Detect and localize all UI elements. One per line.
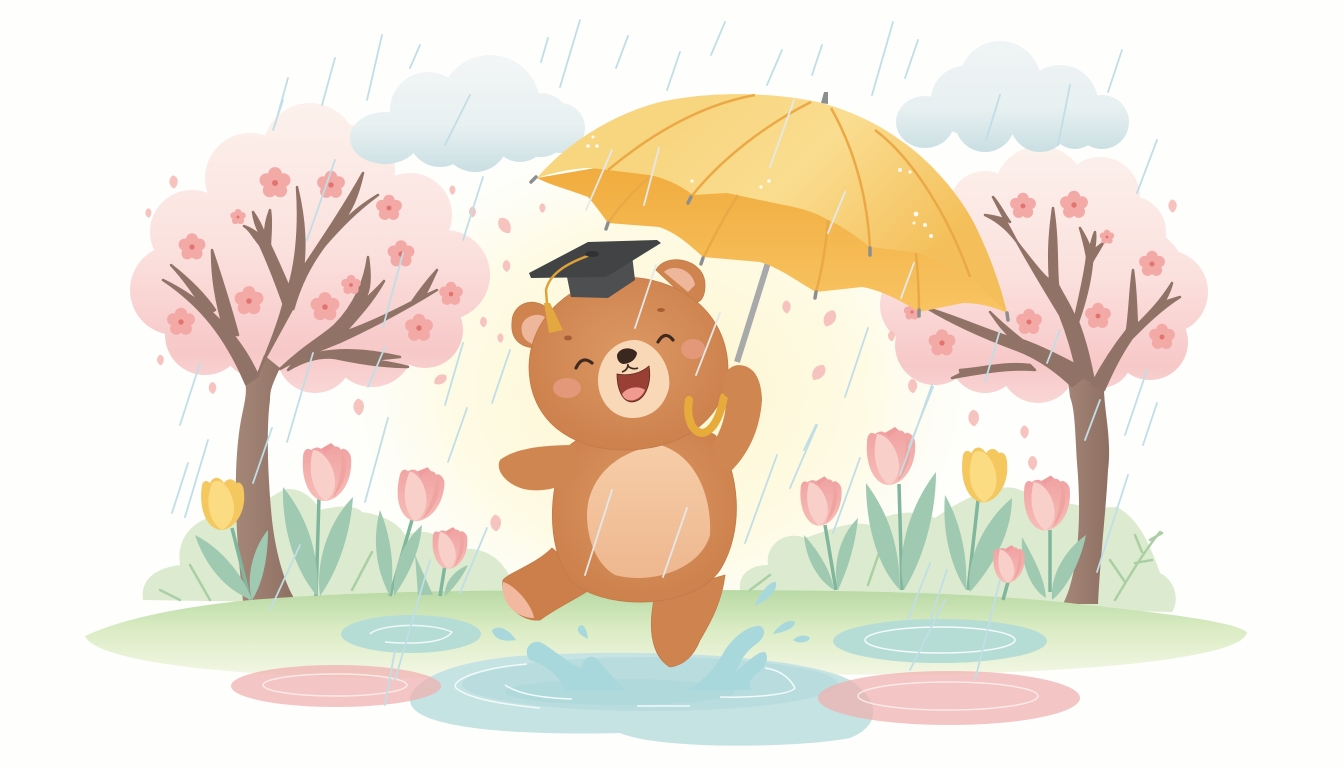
head <box>529 277 728 450</box>
canopy <box>880 146 1208 403</box>
bushes <box>143 487 1176 612</box>
bear <box>499 240 762 667</box>
falling petals <box>145 175 1177 531</box>
sprigs <box>160 532 1162 600</box>
blossoms <box>1010 193 1036 218</box>
canopy underside <box>537 150 1007 313</box>
trunk and branches <box>927 197 1180 604</box>
cloud: left <box>350 55 585 172</box>
puddle: small left green <box>341 615 481 653</box>
eyes <box>576 335 673 368</box>
tulips: right group <box>800 427 1086 600</box>
ribs <box>608 95 970 312</box>
graduation cap <box>529 240 661 333</box>
belly <box>587 445 710 578</box>
puddle: right green <box>833 619 1047 663</box>
tree: right <box>880 146 1208 604</box>
eyebrows <box>564 336 572 340</box>
tree: left <box>130 103 490 601</box>
sparkles on canopy <box>586 136 933 238</box>
tulips: left group <box>195 443 468 600</box>
left arm <box>499 445 580 490</box>
ears <box>512 302 550 348</box>
canopy top <box>537 94 1007 313</box>
muzzle <box>598 340 669 418</box>
puddle: right pink <box>818 671 1080 725</box>
handle <box>688 397 724 433</box>
shaft <box>737 205 786 362</box>
umbrella <box>531 92 1008 362</box>
front leg <box>651 575 725 667</box>
right arm <box>712 371 762 472</box>
canopy <box>130 103 490 393</box>
puddle: central <box>410 653 873 746</box>
bear paw and umbrella handle <box>688 365 761 433</box>
water splash <box>492 582 810 691</box>
trunk and branches <box>163 173 437 601</box>
ground <box>85 590 1247 678</box>
background glow <box>300 100 1020 680</box>
rain over bear and umbrella <box>585 100 914 577</box>
blossoms <box>260 167 290 197</box>
puddle: left pink <box>231 665 441 707</box>
rain <box>172 20 1157 705</box>
back leg <box>503 548 596 620</box>
paw <box>722 365 761 418</box>
nose <box>617 348 637 364</box>
open mouth <box>617 366 650 402</box>
cloud: right <box>896 41 1129 152</box>
body <box>552 423 736 602</box>
rib tips and top <box>531 177 1008 320</box>
cheeks <box>553 378 581 398</box>
